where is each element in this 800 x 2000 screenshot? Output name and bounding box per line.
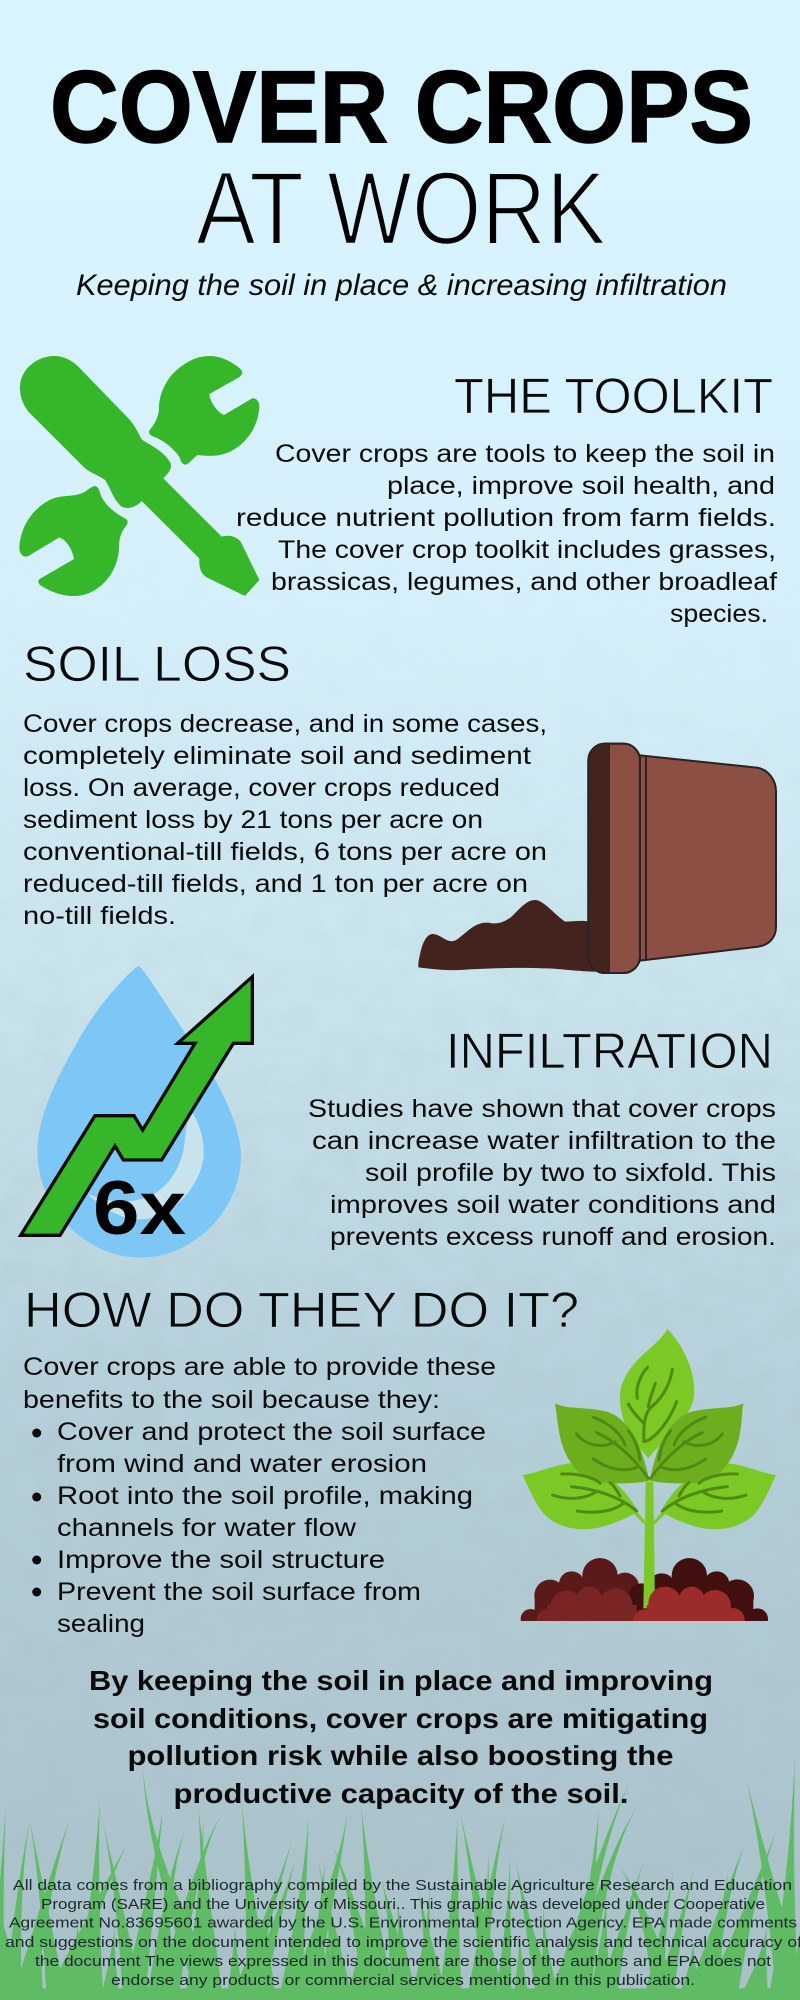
text: toolkit body: brassicas, legumes, and other broadleaf bbox=[271, 568, 777, 596]
title: COVER CROPS bbox=[50, 50, 753, 164]
footer disclaimer: and suggestions on the document intended to improve the scientific analysis and technical accuracy of bbox=[5, 1934, 800, 1951]
text: toolkit body: Cover crops are tools to keep the soil in bbox=[275, 440, 775, 468]
text: how do they do it body: Cover and protect the soil surface bbox=[57, 1418, 486, 1446]
text: toolkit body bbox=[236, 440, 777, 628]
closing statement: By keeping the soil in place and improving bbox=[89, 1665, 713, 1696]
footer disclaimer: All data comes from a bibliography compiled by the Sustainable Agriculture Research and Education bbox=[13, 1877, 792, 1894]
footer disclaimer: Agreement No.83695601 awarded by the U.S. Environmental Protection Agency. EPA made comments bbox=[9, 1914, 797, 1932]
drop highlight bbox=[87, 1113, 204, 1219]
text: toolkit body: place, improve soil health, and bbox=[387, 472, 775, 500]
icon: water drop and arrow bbox=[21, 966, 252, 1258]
heading: soil loss: SOIL LOSS bbox=[23, 636, 291, 692]
closing statement bbox=[89, 1665, 713, 1809]
icon: seedling in soil bbox=[521, 1329, 776, 1632]
text: soil loss body: reduced-till fields, and 1 ton per acre on bbox=[23, 870, 528, 898]
text: how do they do it body bbox=[23, 1353, 496, 1638]
footer disclaimer: the document The views expressed in this document are those of the authors and EPA does not bbox=[35, 1953, 772, 1970]
closing statement: soil conditions, cover crops are mitigating bbox=[93, 1703, 708, 1734]
text: soil loss body: no-till fields. bbox=[23, 902, 176, 930]
grass border bbox=[0, 1753, 800, 2000]
closing statement: pollution risk while also boosting the bbox=[128, 1740, 674, 1771]
text: soil loss body: Cover crops decrease, and in some cases, bbox=[23, 710, 547, 738]
text: infiltration body: soil profile by two to sixfold. This bbox=[365, 1159, 776, 1187]
text: infiltration body: improves soil water conditions and bbox=[330, 1191, 776, 1219]
icon: tools bbox=[19, 356, 259, 596]
footer disclaimer: Program (SARE) and the University of Missouri.. This graphic was developed under Cooperative bbox=[41, 1896, 765, 1913]
text: how do they do it body: Cover crops are able to provide these bbox=[23, 1353, 496, 1381]
text: soil loss body: completely eliminate soil and sediment bbox=[23, 742, 531, 770]
rising arrow bbox=[21, 977, 252, 1235]
text: toolkit body: reduce nutrient pollution from farm fields. bbox=[236, 504, 776, 532]
icon: tipped flower pot with spilled soil bbox=[418, 744, 776, 973]
heading: the toolkit: THE TOOLKIT bbox=[454, 368, 773, 424]
text: toolkit body: species. bbox=[670, 600, 768, 628]
leaves bbox=[523, 1329, 776, 1529]
text: soil loss body bbox=[23, 710, 547, 930]
veins bbox=[553, 1367, 746, 1512]
text: how do they do it body: benefits to the soil because they: bbox=[23, 1386, 440, 1414]
subtitle: Keeping the soil in place & increasing infiltration bbox=[76, 269, 727, 302]
text: how do they do it body: Improve the soil structure bbox=[57, 1546, 385, 1574]
water drop bbox=[37, 966, 241, 1258]
text: how do they do it body: Root into the soil profile, making bbox=[57, 1482, 473, 1510]
footer disclaimer: endorse any products or commercial services mentioned in this publication. bbox=[111, 1972, 695, 1989]
text: infiltration body: prevents excess runoff and erosion. bbox=[330, 1223, 776, 1251]
text: toolkit body: The cover crop toolkit includes grasses, bbox=[278, 536, 776, 564]
text: soil loss body: conventional-till fields, 6 tons per acre on bbox=[23, 838, 547, 866]
text: how do they do it body: Prevent the soil surface from bbox=[57, 1578, 421, 1606]
label: 6x: 6x bbox=[93, 1166, 186, 1251]
stem bbox=[634, 1482, 665, 1608]
heading: how do they do it: HOW DO THEY DO IT? bbox=[24, 1282, 579, 1338]
text: infiltration body bbox=[308, 1095, 776, 1251]
text: soil loss body: loss. On average, cover crops reduced bbox=[23, 774, 500, 802]
heading: infiltration: INFILTRATION bbox=[446, 1023, 773, 1079]
title: AT WORK bbox=[196, 151, 606, 267]
text: how do they do it body: channels for water flow bbox=[57, 1514, 357, 1542]
text: how do they do it body: from wind and water erosion bbox=[57, 1450, 427, 1478]
text: infiltration body: can increase water infiltration to the bbox=[312, 1127, 776, 1155]
closing statement: productive capacity of the soil. bbox=[174, 1778, 628, 1809]
text: how do they do it body: sealing bbox=[57, 1610, 145, 1638]
footer disclaimer bbox=[5, 1877, 800, 1989]
text: infiltration body: Studies have shown that cover crops bbox=[308, 1095, 776, 1123]
title bbox=[50, 50, 753, 267]
text: soil loss body: sediment loss by 21 tons per acre on bbox=[23, 806, 483, 834]
